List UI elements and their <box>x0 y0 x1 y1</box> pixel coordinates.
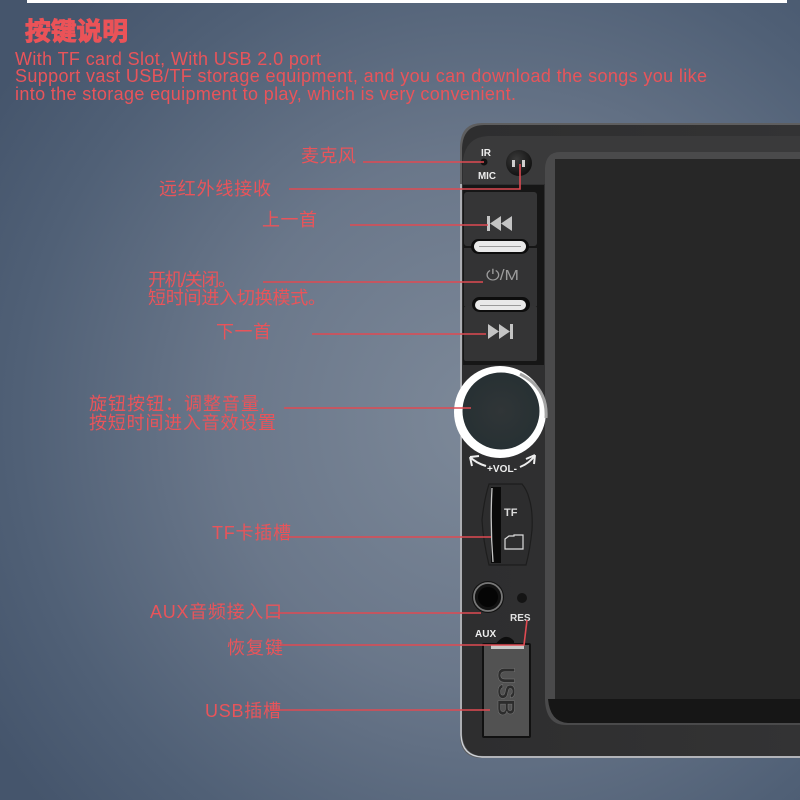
callout: volume knob: 按短时间进入音效设置 <box>89 413 276 433</box>
screen bezel <box>545 152 800 725</box>
callout: previous track: 上一首 <box>262 210 317 230</box>
top white strip <box>27 0 787 3</box>
power / mode button <box>464 248 537 306</box>
callout: reset key: 恢复键 <box>227 638 283 658</box>
AUX label: AUX <box>475 629 496 640</box>
callout: power / mode: 开机/关闭。 <box>148 270 236 290</box>
IR MIC labels <box>478 148 496 182</box>
volume label <box>470 455 535 475</box>
callout: TF slot: TF卡插槽 <box>212 523 291 543</box>
mic hole <box>480 158 488 166</box>
callout: infrared receiver: 远红外线接收 <box>159 179 271 199</box>
callout: reset key <box>227 620 527 658</box>
callout: infrared receiver <box>159 164 520 199</box>
car stereo device <box>454 123 800 758</box>
IR MIC labels: MIC <box>478 171 496 182</box>
icon: memory card <box>505 535 523 549</box>
AUX jack <box>472 581 504 613</box>
intro text: Support vast USB/TF storage equipment, and you can download the songs you like <box>15 66 707 86</box>
callout: volume knob: 旋钮按钮：调整音量, <box>89 394 265 414</box>
RES label: RES <box>510 613 531 624</box>
previous button <box>464 192 537 246</box>
callout: microphone: 麦克风 <box>301 146 356 166</box>
TF slot: TF <box>504 507 518 519</box>
TF slot <box>482 484 532 565</box>
upper pill button <box>471 239 529 254</box>
USB slot <box>482 637 531 738</box>
lower pill button <box>472 297 530 312</box>
callout: power / mode <box>148 270 483 308</box>
icon: next <box>488 324 513 339</box>
IR sensor <box>506 150 532 176</box>
volume label: +VOL- <box>487 464 517 475</box>
power mode label: ⏻/M <box>486 267 519 284</box>
screen <box>555 159 800 699</box>
intro text <box>15 49 707 104</box>
device body <box>460 123 800 758</box>
icon: previous <box>487 216 512 231</box>
callout: USB slot: USB插槽 <box>205 701 281 721</box>
title: 按键说明 <box>25 18 128 46</box>
button column <box>463 185 544 365</box>
intro text: With TF card Slot, With USB 2.0 port <box>15 49 321 69</box>
callout: next track: 下一首 <box>216 322 271 342</box>
callout: AUX input: AUX音频接入口 <box>150 602 282 622</box>
next button <box>464 306 537 361</box>
intro text: into the storage equipment to play, which is very convenient. <box>15 84 516 104</box>
callout: power / mode: 短时间进入切换模式。 <box>148 288 326 308</box>
callout: volume knob <box>89 394 471 433</box>
IR MIC labels: IR <box>481 148 492 159</box>
volume knob <box>454 366 546 458</box>
reset hole <box>517 593 527 603</box>
USB slot: USB <box>492 667 519 716</box>
